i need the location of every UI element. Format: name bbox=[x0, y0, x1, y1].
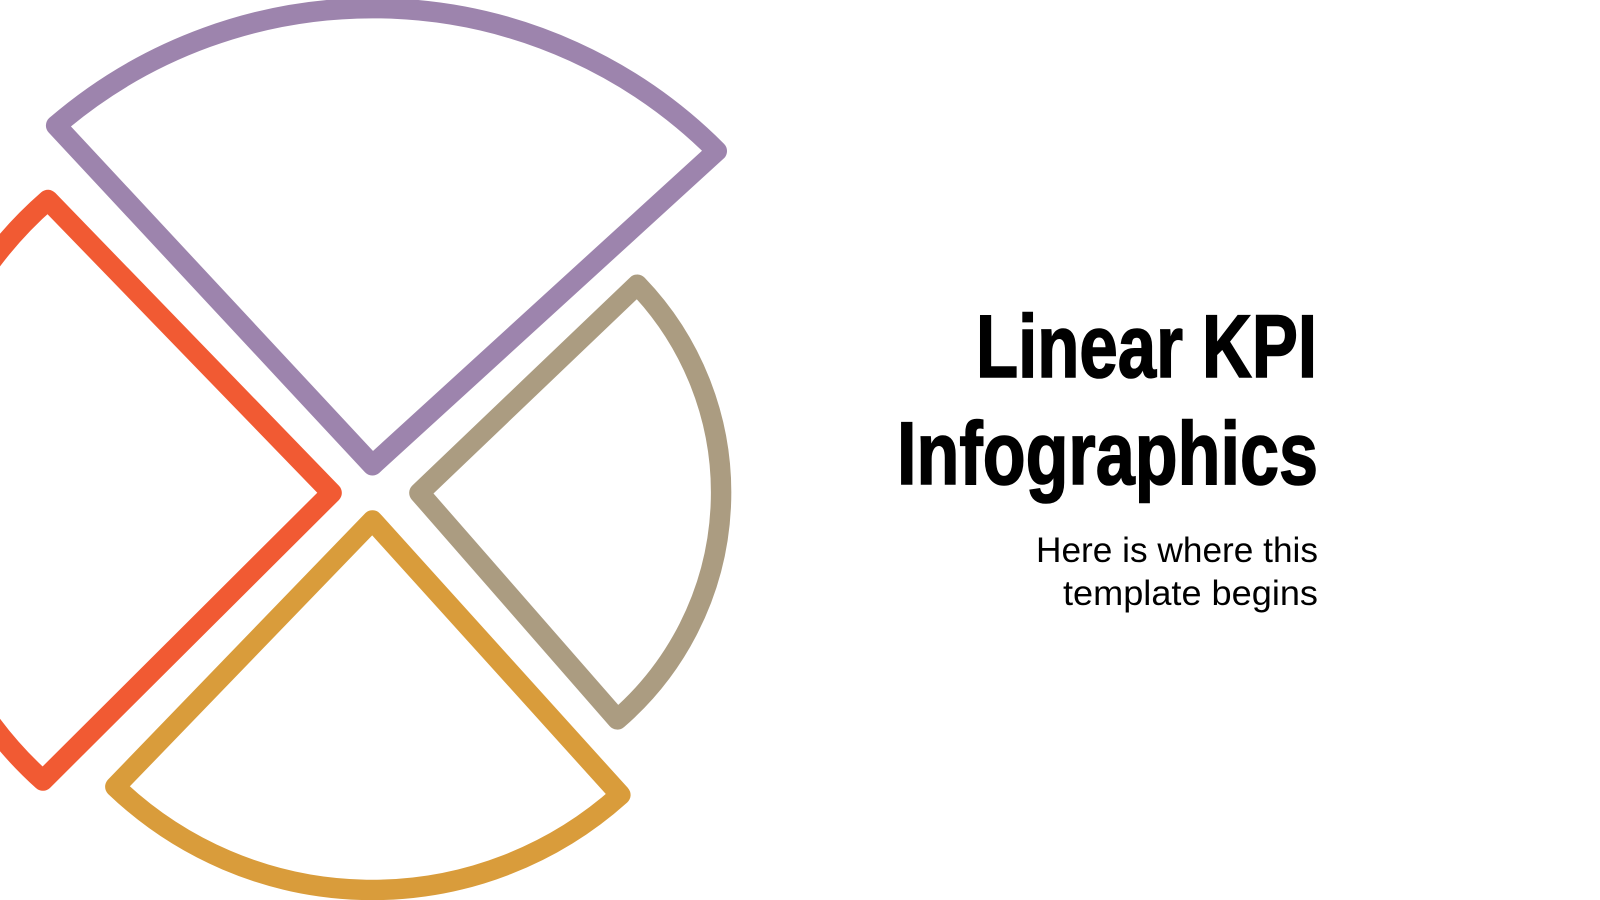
title: Linear KPI bbox=[976, 296, 1317, 396]
circular diagram of four sectors bbox=[0, 8, 721, 890]
sector: tan right bbox=[419, 285, 721, 719]
sector: purple top bbox=[56, 8, 717, 465]
title: Infographics bbox=[897, 403, 1318, 503]
sector: orange bottom bbox=[115, 520, 620, 890]
subtitle: Here is where this bbox=[1036, 531, 1318, 570]
subtitle: template begins bbox=[1063, 574, 1318, 613]
sector: red left bbox=[0, 200, 332, 781]
title bbox=[897, 296, 1318, 503]
subtitle bbox=[1036, 531, 1318, 613]
